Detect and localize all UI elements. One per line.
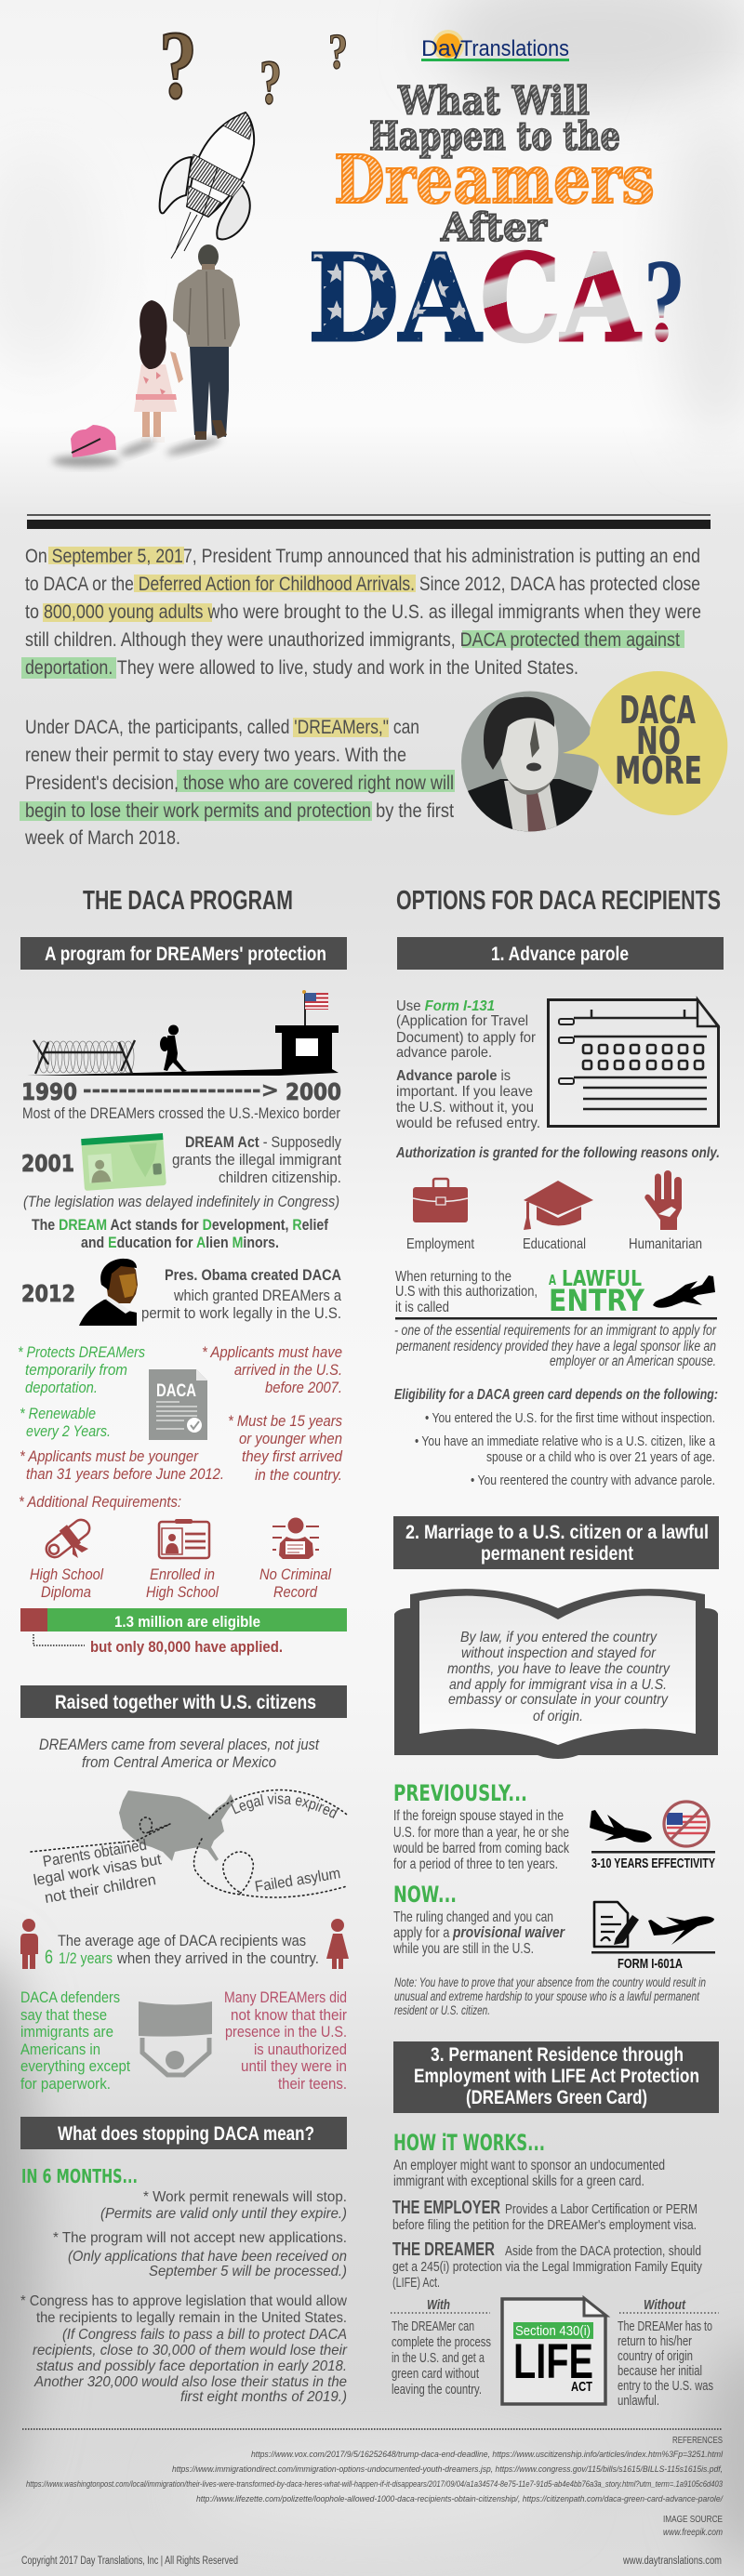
text: green card eligibility list xyxy=(394,1387,718,1488)
text: in six months consequences: * Work permit renewals will stop. xyxy=(143,2189,347,2205)
icon: open book with legal text: and apply for immigrant visa in a U.S. xyxy=(449,1677,667,1693)
title: Dreamers xyxy=(334,140,655,218)
icon: female person xyxy=(326,1919,349,1969)
text: in six months consequences: status and possibly face deportation in early 2018. xyxy=(36,2358,347,2374)
text: previously: for a period of three to ten years. xyxy=(393,1856,558,1872)
timeline years 1990 to 2000: Most of the DREAMers crossed the U.S.-Mexico border xyxy=(22,1105,340,1122)
additional requirement icons: High School xyxy=(30,1566,104,1583)
additional requirement icons: Record xyxy=(273,1584,318,1601)
section bar: permanent residence: 3. Permanent Residence through xyxy=(431,2044,684,2066)
icon: helping hand xyxy=(644,1170,682,1230)
timeline years 1990 to 2000: 1990 xyxy=(21,1078,77,1105)
text: in six months consequences: (Permits are valid only until they expire.) xyxy=(100,2206,347,2222)
logo: Day Translations: Translations xyxy=(460,36,569,61)
icon: open book with legal text: without inspection and stayed for xyxy=(461,1645,657,1661)
icon: backpack xyxy=(52,425,221,467)
logo: Day Translations xyxy=(421,30,569,61)
section bar: what does stopping DACA mean: What does stopping DACA mean? xyxy=(58,2123,314,2145)
bar chart: eligibility versus applied: 1.3 million are eligible xyxy=(114,1614,260,1631)
intro text with highlights: deportation. They were allowed to live, study and work in the United States. xyxy=(25,657,578,679)
section bar: a program for DREAMers' protection: A program for DREAMers' protection xyxy=(45,944,326,965)
additional requirement icons: Diploma xyxy=(41,1584,91,1601)
2001 DREAM Act block: (The legislation was delayed indefinitely in Congress) xyxy=(23,1194,339,1210)
timeline years 1990 to 2000: 2000 xyxy=(286,1078,341,1105)
text: without LIFE Act: return to his/her xyxy=(618,2334,692,2349)
text: now: The ruling changed and you can xyxy=(393,1909,553,1925)
text: previously: U.S. for more than a year, he or she xyxy=(393,1825,569,1841)
text: origins of DREAMers: DREAMers came from several places, not just xyxy=(39,1737,320,1753)
2012 Obama block: Pres. Obama created DACA xyxy=(165,1267,341,1284)
footer: references and copyright: IMAGE SOURCE xyxy=(663,2515,723,2525)
requirements list in red: or younger when xyxy=(239,1431,342,1447)
timeline illustration: border fence, boy, guard house xyxy=(27,990,339,1076)
text: how it works: Aside from the DACA protection, should xyxy=(505,2243,701,2259)
2012 Obama block: permit to work legally in the U.S. xyxy=(141,1305,341,1322)
footer: references and copyright: Copyright 2017 Day Translations, Inc | All Rights Reserved xyxy=(21,2556,238,2567)
text: how it works: THE EMPLOYER xyxy=(392,2198,500,2218)
icon: open book with legal text xyxy=(394,1589,718,1759)
icon: guard house with flag xyxy=(275,990,339,1072)
title: After xyxy=(440,205,548,250)
text: advance parole explanation: advance parole. xyxy=(396,1045,492,1061)
2001 DREAM Act block: grants the illegal immigrant xyxy=(172,1152,341,1169)
icon: question marks: ? xyxy=(159,10,197,119)
icon: signed form and departing plane: FORM I-601A xyxy=(618,1957,683,1972)
benefits list in green: deportation. xyxy=(25,1380,98,1396)
text: with LIFE Act: The DREAMer can xyxy=(392,2319,474,2334)
icon: ground xyxy=(27,1069,339,1076)
2001 DREAM Act block xyxy=(21,1133,342,1251)
text: DREAMers did not know: their teens. xyxy=(278,2076,347,2093)
text: advance parole explanation: important. If you leave xyxy=(396,1084,533,1100)
footer: references and copyright: www.freepik.com xyxy=(663,2528,723,2538)
requirements list in red: * Applicants must have xyxy=(202,1344,342,1361)
additional requirement icons: Enrolled in xyxy=(150,1566,215,1583)
2012 Obama block: which granted DREAMers a xyxy=(173,1288,342,1304)
additional requirement icons: No Criminal xyxy=(259,1566,332,1583)
heading: previously: PREVIOUSLY... xyxy=(393,1780,527,1806)
icon: plane and barred flag xyxy=(590,1802,715,1871)
benefits list in green: every 2 Years. xyxy=(26,1423,111,1440)
2012 Obama block xyxy=(21,1259,342,1326)
header illustration: question marks, rocket, father and daughter xyxy=(52,10,348,467)
authorization reason icons xyxy=(406,1170,702,1252)
icon: DACA document: DACA xyxy=(156,1381,196,1401)
text: how it works: (LIFE) Act. xyxy=(392,2275,440,2291)
text: in six months consequences: recipients, close to 30,000 of them would lose their xyxy=(33,2343,348,2358)
icon: barbed wire fence xyxy=(33,1040,135,1074)
footer: references and copyright xyxy=(21,2429,724,2567)
text: how it works: THE DREAMER xyxy=(392,2239,495,2260)
heading: the DACA program: THE DACA PROGRAM xyxy=(83,886,293,916)
average age statistic: 6 xyxy=(45,1947,53,1968)
text: a lawful entry: it is called xyxy=(395,1300,449,1315)
text: DACA defenders: Americans in xyxy=(20,2041,100,2058)
text: note xyxy=(394,1975,706,2017)
text: in six months consequences: (If Congress fails to pass a bill to protect DACA xyxy=(62,2327,347,2343)
text: DREAMers did not know: Many DREAMers did xyxy=(224,1989,347,2006)
text: a lawful entry: When returning to the xyxy=(395,1269,512,1285)
text: how it works: immigrant with exceptional skills for a green card. xyxy=(393,2173,644,2189)
text: DACA defenders: for paperwork. xyxy=(20,2076,111,2093)
callout: DACA NO MORE speech bubble: NO xyxy=(636,719,681,763)
icon: graduation cap xyxy=(524,1181,593,1230)
additional requirement icons: High School xyxy=(146,1584,219,1601)
timeline years 1990 to 2000 xyxy=(21,1078,341,1122)
text: DREAMers did not know: is unauthorized xyxy=(254,2041,347,2058)
icon: rocket xyxy=(160,112,254,258)
text: without LIFE Act: Without xyxy=(644,2297,686,2313)
icon: male person xyxy=(20,1919,38,1969)
callout: DACA NO MORE speech bubble: MORE xyxy=(615,748,702,793)
section bar: raised together: Raised together with U.S. citizens xyxy=(55,1692,316,1713)
requirements list in red: before 2007. xyxy=(265,1380,342,1396)
intro text with highlights: President's decision, those who are covered right now will xyxy=(25,773,454,794)
text: DACA defenders xyxy=(20,1989,130,2093)
text: previously xyxy=(392,1780,570,1872)
footer: references and copyright: www.daytranslations.com xyxy=(622,2556,722,2567)
title xyxy=(308,78,685,369)
requirements list in red: * Additional Requirements: xyxy=(19,1494,181,1511)
text: origins of DREAMers xyxy=(39,1737,320,1771)
text: in six months consequences: * The program will not accept new applications. xyxy=(53,2230,347,2246)
icon: landing plane xyxy=(653,1275,715,1308)
intro text with highlights: renew their permit to stay every two years. With the xyxy=(25,745,406,766)
benefits list in green: temporarily from xyxy=(25,1362,127,1379)
heading: a lawful entry xyxy=(549,1267,645,1318)
map: United States with immigration routes: Failed asylum xyxy=(254,1865,341,1896)
icon: green card xyxy=(81,1133,166,1191)
text: with LIFE Act: leaving the country. xyxy=(392,2383,482,2398)
section bar: permanent residence: (DREAMers Green Card) xyxy=(466,2087,647,2108)
section bar: marriage xyxy=(393,1516,719,1569)
text: how it works xyxy=(392,2130,702,2291)
requirements list in red: than 31 years before June 2012. xyxy=(26,1466,224,1483)
requirements list in red: * Must be 15 years xyxy=(228,1413,342,1430)
icon: LIFE Act document xyxy=(502,2298,606,2404)
section bar: raised together xyxy=(20,1685,347,1718)
text: DREAMers did not know: presence in the U.S. xyxy=(225,2024,347,2041)
requirements list in red: they first arrived xyxy=(242,1448,343,1465)
icon: open book with legal text: By law, if you entered the country xyxy=(460,1630,658,1645)
benefits list in green: * Protects DREAMers xyxy=(18,1344,145,1361)
text: previously: would be barred from coming back xyxy=(392,1841,570,1856)
bar chart: eligibility versus applied xyxy=(20,1608,347,1656)
text: DACA defenders: DACA defenders xyxy=(20,1989,120,2006)
section bar: a program for DREAMers' protection xyxy=(20,937,347,970)
text: without LIFE Act: country of origin xyxy=(618,2349,693,2364)
text: advance parole explanation: Use Form I-131 xyxy=(396,998,495,1014)
authorization reason icons: Employment xyxy=(406,1236,474,1252)
text: previously: If the foreign spouse stayed in the xyxy=(393,1808,564,1824)
requirements list in red xyxy=(19,1344,343,1511)
logo: Day Translations: Day xyxy=(421,36,462,61)
title: ? xyxy=(644,234,685,366)
title: Happen to the xyxy=(369,113,620,159)
2001 DREAM Act block: DREAM Act - Supposedly xyxy=(185,1134,342,1151)
footer: references and copyright: REFERENCES xyxy=(672,2436,723,2446)
additional requirement icons xyxy=(30,1515,332,1601)
icon: briefcase xyxy=(413,1179,468,1222)
icon: diploma xyxy=(42,1515,94,1562)
icon: question marks: ? xyxy=(328,23,348,79)
icon: open book with legal text: of origin. xyxy=(533,1709,583,1724)
text: in six months consequences xyxy=(20,2165,348,2405)
text: how it works: Provides a Labor Certification or PERM xyxy=(505,2201,698,2217)
icon: question marks: ? xyxy=(259,46,282,117)
title: CA xyxy=(480,229,642,369)
icon: student ID card xyxy=(159,1519,209,1558)
2001 DREAM Act block: 2001 xyxy=(21,1150,74,1177)
text: with LIFE Act: complete the process xyxy=(392,2335,491,2350)
text: now: while you are still in the U.S. xyxy=(392,1941,534,1957)
2012 Obama block: 2012 xyxy=(21,1280,75,1307)
intro text with highlights: Under DACA, the participants, called 'DREAMers," can xyxy=(25,717,419,738)
icon: Obama portrait xyxy=(79,1259,138,1326)
text: without LIFE Act xyxy=(618,2297,719,2409)
text: without LIFE Act: The DREAMer has to xyxy=(618,2319,712,2334)
text: a lawful entry xyxy=(394,1267,717,1369)
map: United States with immigration routes: not their children xyxy=(44,1871,157,1907)
icon: LIFE Act document: Section 430(i) xyxy=(515,2323,591,2339)
text: now xyxy=(392,1882,565,1957)
2001 DREAM Act block: The DREAM Act stands for Development, Relief xyxy=(32,1217,328,1234)
section bar: what does stopping DACA mean xyxy=(20,2117,347,2149)
average age statistic: The average age of DACA recipients was xyxy=(58,1933,306,1949)
text: how it works: An employer might want to sponsor an undocumented xyxy=(393,2158,665,2173)
text: origins of DREAMers: from Central America or Mexico xyxy=(82,1754,276,1771)
heading: now: NOW... xyxy=(393,1882,457,1908)
text: without LIFE Act: because her initial xyxy=(618,2364,702,2379)
2001 DREAM Act block: and Education for Alien Minors. xyxy=(81,1235,279,1251)
text: advance parole explanation: (Application for Travel xyxy=(396,1013,528,1029)
icon: signed form and departing plane xyxy=(591,1902,715,1972)
requirements list in red: in the country. xyxy=(255,1467,342,1484)
intro text with highlights: begin to lose their work permits and protection by the first xyxy=(25,800,454,822)
text: advance parole explanation: Document) to apply for xyxy=(396,1030,537,1046)
icon: LIFE Act document: LIFE xyxy=(513,2334,593,2389)
text: now: apply for a provisional waiver xyxy=(393,1923,565,1941)
text: advance parole explanation xyxy=(395,998,540,1131)
text: DREAMers did not know: until they were in xyxy=(241,2058,347,2075)
icon: father xyxy=(173,244,240,440)
icon: open book with legal text: months, you have to leave the country xyxy=(447,1661,671,1677)
average age statistic: when they arrived in the country. xyxy=(116,1950,319,1967)
icon: no criminal record xyxy=(272,1517,319,1559)
title: DA xyxy=(308,229,483,369)
text: note: resident or U.S. citizen. xyxy=(394,2003,490,2017)
heading: in 6 months: IN 6 MONTHS... xyxy=(21,2165,138,2187)
icon: travel document form xyxy=(549,999,718,1127)
section bar: advance parole xyxy=(397,937,724,970)
text: advance parole explanation: would be refused entry. xyxy=(395,1116,540,1131)
timeline years 1990 to 2000: --------------------> xyxy=(83,1079,279,1103)
icon: question marks xyxy=(159,10,348,119)
icon: daughter xyxy=(134,300,183,443)
icon: open book with legal text: embassy or consulate in your country xyxy=(448,1692,669,1708)
requirements list in red: * Applicants must be younger xyxy=(20,1448,199,1465)
highlights xyxy=(20,547,684,821)
text: DACA defenders: say that these xyxy=(20,2007,107,2024)
text: with LIFE Act xyxy=(391,2297,491,2398)
authorization reason icons: Educational xyxy=(523,1236,586,1252)
text: a lawful entry: U.S with this authorization, xyxy=(395,1284,538,1300)
requirements list in red: arrived in the U.S. xyxy=(234,1362,342,1379)
section bar: marriage: permanent resident xyxy=(481,1543,633,1565)
map: United States with immigration routes xyxy=(30,1789,348,1907)
text: DACA defenders: everything except xyxy=(20,2058,130,2075)
divider bars xyxy=(27,514,711,529)
text: DREAMers did not know xyxy=(224,1989,347,2093)
heading: a lawful entry: LAWFUL xyxy=(562,1267,642,1291)
text: advance parole explanation: Advance parole is xyxy=(396,1068,511,1084)
text: without LIFE Act: entry to the U.S. was xyxy=(618,2379,713,2394)
benefits list in green xyxy=(18,1344,145,1440)
callout: DACA NO MORE speech bubble: DACA xyxy=(619,688,696,733)
2001 DREAM Act block: children citizenship. xyxy=(219,1169,341,1186)
text: without LIFE Act: unlawful. xyxy=(618,2394,659,2409)
icon: walking boy with backpack xyxy=(160,1024,187,1072)
icon: US map xyxy=(119,1790,234,1861)
text: DACA defenders: immigrants are xyxy=(20,2024,113,2041)
intro text with highlights xyxy=(20,546,701,849)
text: in six months consequences: September 5 will be processed.) xyxy=(149,2264,347,2279)
heading: a lawful entry: ENTRY xyxy=(549,1283,645,1318)
callout: DACA NO MORE speech bubble xyxy=(563,671,727,815)
text: DREAMers did not know: not know that their xyxy=(231,2007,347,2024)
text: in six months consequences: first eight months of 2019.) xyxy=(180,2389,347,2405)
icon: Trump portrait xyxy=(461,692,599,831)
authorization reason icons: Humanitarian xyxy=(629,1236,702,1252)
text: with LIFE Act: green card without xyxy=(392,2367,479,2382)
text: in six months consequences: (Only applications that have been received on xyxy=(68,2249,347,2265)
section bar: permanent residence xyxy=(393,2041,719,2113)
text: advance parole explanation: the U.S. without it, you xyxy=(396,1100,534,1116)
icon: DACA document xyxy=(149,1369,207,1440)
text: with LIFE Act: in the U.S. and get a xyxy=(392,2351,485,2366)
heading: how it works: HOW iT WORKS... xyxy=(393,2130,545,2156)
map: United States with immigration routes: Parents obtained xyxy=(42,1837,148,1870)
title: What Will xyxy=(397,78,590,124)
intro text with highlights: week of March 2018. xyxy=(24,827,180,849)
map: United States with immigration routes: Legal visa expired xyxy=(231,1792,339,1818)
section bar: advance parole: 1. Advance parole xyxy=(491,944,629,965)
bar chart: eligibility versus applied: but only 80,000 have applied. xyxy=(90,1638,283,1656)
average age statistic xyxy=(20,1919,349,1969)
average age statistic: 1/2 years xyxy=(59,1950,113,1967)
heading: a lawful entry: A xyxy=(549,1272,556,1288)
map: United States with immigration routes: legal work visas but xyxy=(33,1851,163,1889)
text: in six months consequences: Another 320,000 would also lose their status in the xyxy=(33,2374,347,2390)
text: with LIFE Act: With xyxy=(427,2297,450,2313)
icon: LIFE Act document: ACT xyxy=(571,2379,592,2395)
benefits list in green: * Renewable xyxy=(20,1406,96,1422)
text: in six months consequences: * Congress has to approve legislation that would allow xyxy=(20,2293,347,2309)
icon: protester holding a sign xyxy=(139,2001,212,2075)
text: in six months consequences: the recipients to legally remain in the United States. xyxy=(36,2310,347,2326)
